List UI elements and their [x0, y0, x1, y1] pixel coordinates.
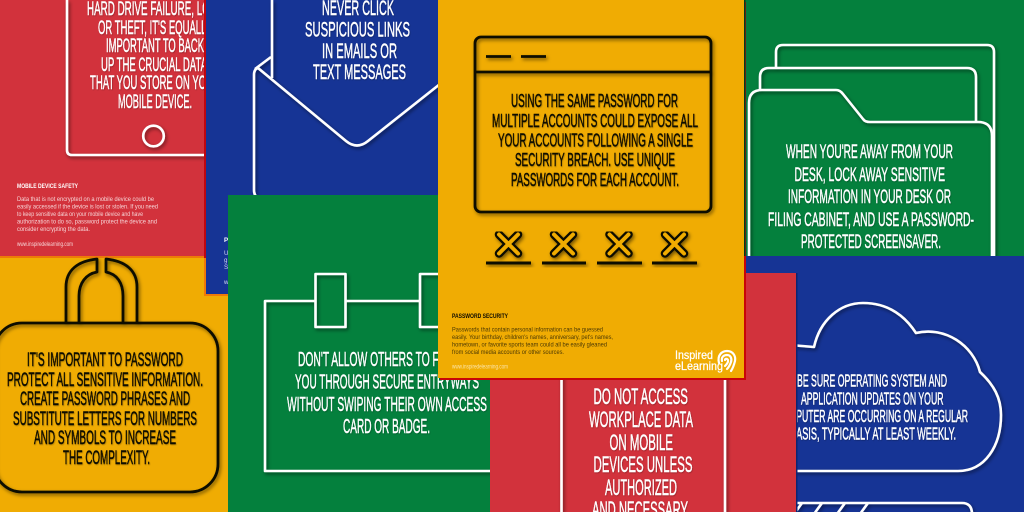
- envelope message text: SUSPICIOUS LINKS: [305, 18, 410, 42]
- footer: mobile device safety copy: Data that is not encrypted on a mobile device could be: [17, 196, 154, 203]
- phone message text: [589, 384, 693, 512]
- browser message text: [492, 90, 698, 190]
- tablet message text: IMPORTANT TO BACK: [106, 35, 204, 57]
- panel: password protect (yellow, bottom left): [0, 256, 230, 512]
- footer: mobile device safety copy: to keep sensitive data on your mobile device and have: [17, 211, 143, 218]
- panel: tailgating (green, bottom centre): [228, 195, 492, 512]
- tablet message text: UP THE CRUCIAL DATA: [101, 54, 207, 76]
- browser message text: PASSWORDS FOR EACH ACCOUNT.: [511, 169, 679, 190]
- footer: partly hidden caption: U: [224, 250, 228, 257]
- panel: password security (yellow, centre, front): [438, 0, 746, 380]
- icon: envelope with letter: [254, 0, 440, 200]
- footer: mobile device safety copy: www.inspiredelearning.com: [16, 241, 73, 248]
- icon: masked password characters: [486, 234, 697, 263]
- footer: password security copy: easily. Your birthday, children's names, anniversary, pet's names,: [452, 334, 613, 341]
- cloud message text: [776, 370, 968, 444]
- panel: phishing links (blue, top centre): [204, 0, 440, 296]
- phone message text: DO NOT ACCESS: [594, 384, 688, 409]
- badge message text: [287, 348, 487, 438]
- footer: password security copy: from social media accounts or other sources.: [452, 349, 564, 356]
- icon: cloud outline: [790, 303, 1001, 471]
- footer: mobile device safety copy: authorization to do so, password protect the device and: [17, 218, 157, 226]
- panel: software updates (blue, bottom right): [744, 256, 1024, 512]
- padlock message text: CREATE PASSWORD PHRASES AND: [20, 388, 190, 410]
- badge message text: DON'T ALLOW OTHERS TO FOLLOW: [298, 348, 476, 371]
- browser message text: YOUR ACCOUNTS FOLLOWING A SINGLE: [498, 130, 693, 150]
- footer: password security copy: hometown, or favorite sports team could all be easily gleaned: [452, 342, 607, 348]
- panel: filing cabinet (green, top right): [744, 0, 1024, 258]
- footer: password security copy: Passwords that contain personal information can be guessed: [452, 326, 603, 334]
- padlock message text: [7, 349, 203, 469]
- padlock message text: PROTECT ALL SENSITIVE INFORMATION.: [7, 369, 203, 391]
- logo: Inspired eLearning: eLearning: [675, 359, 723, 373]
- footer: partly hidden caption: w: [223, 279, 229, 286]
- footer: mobile device safety copy: [16, 183, 158, 248]
- padlock message text: IT'S IMPORTANT TO PASSWORD: [27, 349, 183, 371]
- footer: partly hidden caption: S: [224, 264, 228, 271]
- footer: mobile device safety copy: MOBILE DEVICE SAFETY: [17, 183, 79, 190]
- icon: server with hatching: [790, 503, 972, 512]
- footer: partly hidden caption: Ph: [224, 237, 232, 244]
- badge message text: YOU THROUGH SECURE ENTRYWAYS: [295, 370, 479, 394]
- phone message text: ON MOBILE: [610, 430, 673, 455]
- footer: password security copy: [451, 313, 613, 370]
- footer: mobile device safety copy: easily accessed if the device is lost or stolen. If you need: [17, 204, 158, 210]
- folder message text: [768, 141, 974, 253]
- icon: padlock: [0, 259, 218, 492]
- padlock message text: THE COMPLEXITY.: [63, 447, 150, 469]
- envelope message text: TEXT MESSAGES: [313, 60, 406, 84]
- tablet message text: THAT YOU STORE ON YOUR: [90, 72, 220, 94]
- envelope message text: IN EMAILS OR: [322, 39, 397, 63]
- logo: Inspired eLearning: [675, 348, 735, 373]
- panel: workplace data (red, bottom centre): [490, 273, 798, 512]
- footer: password security copy: www.inspiredelearning.com: [451, 364, 508, 370]
- phone message text: DEVICES UNLESS: [594, 452, 692, 477]
- footer: partly hidden caption: g: [224, 257, 228, 264]
- browser message text: USING THE SAME PASSWORD FOR: [511, 90, 678, 111]
- envelope message text: [305, 0, 410, 84]
- footer: partly hidden caption: [223, 237, 232, 286]
- icon: stacked folders: [749, 45, 994, 258]
- padlock message text: SUBSTITUTE LETTERS FOR NUMBERS: [13, 408, 197, 430]
- phone message text: WORKPLACE DATA: [589, 407, 693, 432]
- padlock message text: AND SYMBOLS TO INCREASE: [34, 427, 176, 449]
- panel: mobile device safety (red, top left): [0, 0, 223, 257]
- browser message text: MULTIPLE ACCOUNTS COULD EXPOSE ALL: [492, 110, 698, 131]
- tablet message text: [87, 0, 223, 113]
- panel: tailgating (green, bottom centre): WITHOUT SWIPING THEIR OWN ACCESS: [287, 393, 487, 416]
- icon: access badge outline with clips: [265, 274, 492, 471]
- phone message text: AUTHORIZED: [605, 475, 677, 500]
- badge message text: CARD OR BADGE.: [343, 415, 430, 438]
- icon: browser window: [475, 37, 711, 212]
- logo: Inspired eLearning: Inspired: [675, 348, 713, 362]
- icon: phone outline: [562, 370, 725, 512]
- tablet message text: OR THEFT, IT'S EQUALLY: [98, 17, 212, 39]
- icon: tablet outline with home button: [67, 0, 206, 155]
- browser message text: SECURITY BREACH. USE UNIQUE: [515, 149, 675, 170]
- footer: mobile device safety copy: consider encrypting the data.: [17, 226, 90, 233]
- footer: password security copy: PASSWORD SECURITY: [452, 313, 509, 320]
- tablet message text: MOBILE DEVICE.: [118, 91, 192, 113]
